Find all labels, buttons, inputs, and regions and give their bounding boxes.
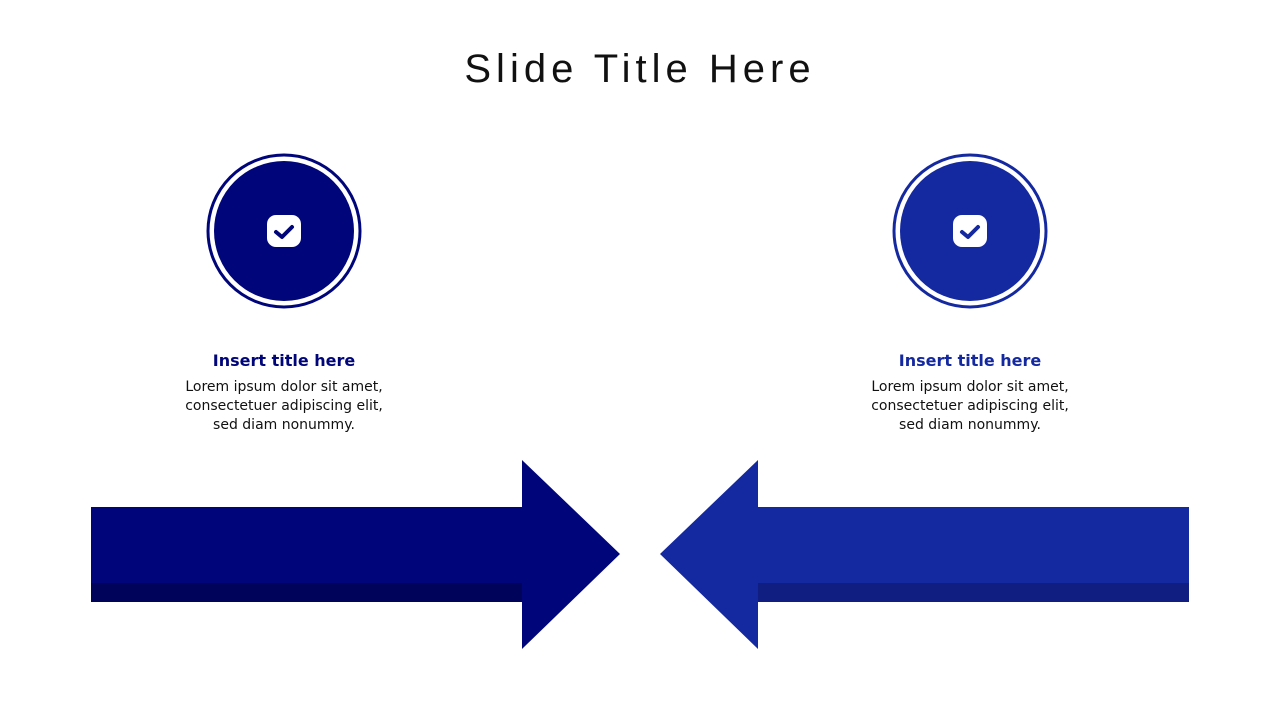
text block right: Lorem ipsum dolor sit amet, xyxy=(871,379,1069,395)
text block left xyxy=(185,351,383,433)
text block left: Lorem ipsum dolor sit amet, xyxy=(185,379,383,395)
icon: left circle xyxy=(208,155,360,307)
text block right: consectetuer adipiscing elit, xyxy=(871,398,1069,414)
title: Slide Title Here xyxy=(464,47,816,91)
text block left: consectetuer adipiscing elit, xyxy=(185,398,383,414)
text block left: sed diam nonummy. xyxy=(213,417,355,433)
text block right: sed diam nonummy. xyxy=(899,417,1041,433)
arrow: left-pointing xyxy=(660,460,1189,649)
text block right: Insert title here xyxy=(899,351,1041,370)
arrow: right-pointing xyxy=(91,460,620,649)
icon: right circle xyxy=(894,155,1046,307)
text block left: Insert title here xyxy=(213,351,355,370)
text block right xyxy=(871,351,1069,433)
